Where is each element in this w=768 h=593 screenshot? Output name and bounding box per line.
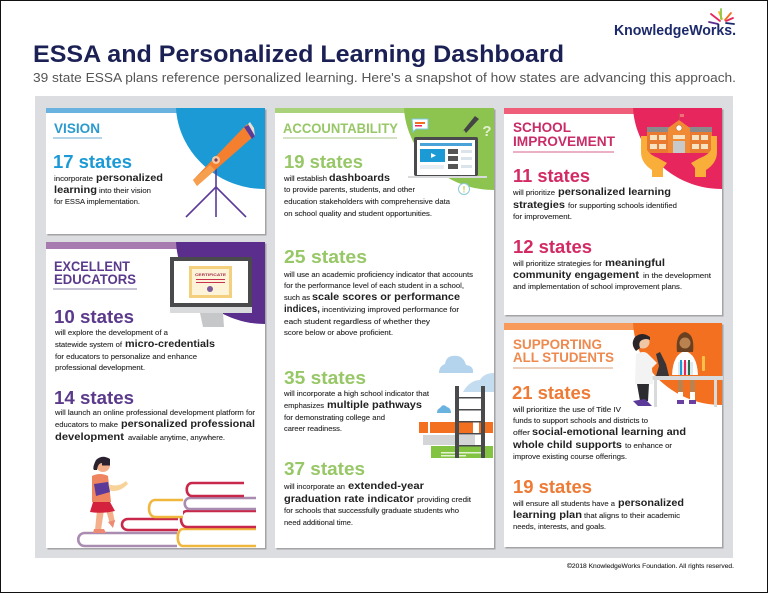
stat: 10 states: statewide system of [55,340,122,349]
icon: question mark: ? [482,123,492,140]
stat: 17 states: for ESSA implementation. [54,197,140,206]
stat: 19 states: personalized [618,498,684,509]
stat: 14 states: personalized professional [121,419,255,430]
icon: exclamation mark [458,184,470,194]
stat: 12 states: will prioritize strategies for [512,259,603,268]
title: ESSA and Personalized Learning Dashboard [33,41,564,68]
stat: 21 states: funds to support schools and districts to [513,416,648,425]
icon: laptop dashboard [408,119,487,178]
heading: vision: VISION [54,121,100,136]
stat: 25 states: such as [284,293,310,302]
stat: 21 states [512,382,686,461]
stat: 10 states: will explore the development of a [54,328,168,337]
illustration: students doing science [633,332,723,407]
stat: 14 states: educators to make [55,420,118,429]
stat: 25 states: score below or above proficient. [284,328,393,337]
heading: supporting all students: ALL STUDENTS [513,350,614,365]
stat: 19 states: 19 states [513,476,592,497]
stat: 25 states: scale scores or performance [312,292,460,303]
stat: 14 states [54,387,256,443]
stat: 11 states: personalized learning [558,187,671,198]
stat: 25 states: for the performance level of each student in a school, [284,281,464,290]
stat: 21 states: improve existing course offerings. [513,452,627,461]
stat: 19 states: dashboards [329,173,390,184]
stat: 17 states [53,151,163,206]
illustration: ladder, books and clouds [419,356,494,458]
heading: supporting all students: SUPPORTING [513,337,602,352]
stat: 14 states: 14 states [54,387,134,408]
stat: 17 states: into their vision [99,186,151,195]
stat: 21 states: will prioritize the use of Title IV [512,405,621,414]
stat: 14 states: available anytime, anywhere. [128,433,225,442]
stat: 14 states: development [55,432,125,443]
stat: 21 states: whole child supports [512,440,622,451]
illustration: girl climbing books [90,457,128,533]
stat: 25 states: 25 states [284,246,367,267]
stat: 10 states: micro-credentials [125,339,215,350]
heading: school improvement: IMPROVEMENT [513,134,616,149]
stat: 10 states: for educators to personalize and enhance [55,352,197,361]
stat: 17 states: 17 states [53,151,132,172]
stat: 19 states: education stakeholders with comprehensive data [284,197,450,206]
stat: 25 states: incentivizing improved performance for [322,305,460,314]
panel: accountability [275,108,496,550]
heading: excellent educators [54,259,136,287]
copyright: ©2018 KnowledgeWorks Foundation. All rights reserved. [567,562,734,570]
stat: 35 states: will incorporate a high school indicator that [283,389,429,398]
stat: 10 states: 10 states [54,306,134,327]
heading: accountability: ACCOUNTABILITY [283,121,398,136]
stat: 37 states [283,458,471,527]
stat: 21 states: 21 states [512,382,591,403]
stat: 17 states: personalized [96,173,163,184]
stat: 35 states [283,367,429,433]
stat: 17 states: learning [54,185,97,196]
illustration: stacked books [78,483,256,546]
stat: 37 states: providing credit [417,495,471,504]
heading: excellent educators: EDUCATORS [54,272,136,287]
stat: 37 states: graduation rate indicator [284,494,414,505]
stat: 37 states: 37 states [284,458,365,479]
stat: 35 states: 35 states [284,367,366,388]
stat: 17 states: incorporate [54,174,93,183]
stat: 12 states: community engagement [513,270,640,281]
stat: 37 states: for schools that successfully graduate students who [284,506,459,515]
stat: 21 states: offer [513,428,531,437]
stat: 37 states: need additional time. [284,518,353,527]
stat: 19 states: learning plan [513,510,582,521]
stat: 11 states: strategies [513,200,565,211]
stat: 37 states: extended-year [348,481,424,492]
heading: school improvement [513,120,616,149]
heading: supporting all students [513,337,614,365]
panel: excellent educators [46,242,266,550]
stat: 19 states: will ensure all students have a [512,499,615,508]
stat: 19 states: on school quality and student opportunities. [284,209,432,218]
icon: school building in hands [641,113,717,177]
stat: 19 states: 19 states [284,151,363,172]
stat: 35 states: emphasizes [284,401,324,410]
icon: pencil [462,116,479,133]
dashboard background [35,96,733,558]
stat: 19 states: that aligns to their academic [584,511,680,520]
icon: monitor with certificate: CERTIFICATE [195,272,226,277]
stat: 21 states: to enhance or [625,441,673,450]
heading: school improvement: SCHOOL [513,120,571,135]
stat: 35 states: for demonstrating college and [284,413,385,422]
stat: 25 states [283,246,473,337]
stat: 12 states: in the development [643,271,711,280]
stat: 19 states [512,476,684,531]
stat: 14 states: will launch an online professional development platform for [54,408,256,417]
stat: 12 states [512,236,711,291]
stat: 19 states: will establish [283,174,327,183]
logo: KnowledgeWorks [614,9,736,39]
icon: telescope [186,122,255,217]
stat: 10 states: professional development. [55,363,145,372]
logo: KnowledgeWorks: KnowledgeWorks. [614,22,736,39]
stat: 21 states: social-emotional learning and [532,427,686,438]
stat: 25 states: each student regardless of whether they [284,317,430,326]
panel: school improvement [504,108,724,316]
stat: 25 states: will use an academic proficiency indicator that accounts [283,270,473,279]
stat: 25 states: indices, [284,304,320,315]
stat: 37 states: will incorporate an [283,482,345,491]
stat: 35 states: career readiness. [284,424,342,433]
panel: supporting all students [504,323,724,548]
stat: 12 states: and implementation of school improvement plans. [513,282,682,291]
stat: 11 states: for improvement. [513,212,572,221]
stat: 35 states: multiple pathways [327,400,422,411]
stat: 12 states: meaningful [605,258,665,269]
stat: 19 states: needs, interests, and goals. [513,522,606,531]
stat: 11 states: 11 states [513,165,590,186]
stat: 11 states [512,165,677,221]
stat: 19 states [283,151,450,218]
stat: 19 states: to provide parents, students, and other [284,185,416,194]
stat: 12 states: 12 states [513,236,592,257]
stat: 10 states [54,306,215,372]
stat: 11 states: will prioritize [512,188,555,197]
icon: monitor with certificate [170,257,252,327]
icon: exclamation mark: ! [462,184,466,194]
panel: vision [46,108,266,236]
subtitle: 39 state ESSA plans reference personalized learning. Here's a snapshot of how states are advancing this approach. [33,71,736,85]
stat: 11 states: for supporting schools identified [568,201,677,210]
heading: excellent educators: EXCELLENT [54,259,131,274]
